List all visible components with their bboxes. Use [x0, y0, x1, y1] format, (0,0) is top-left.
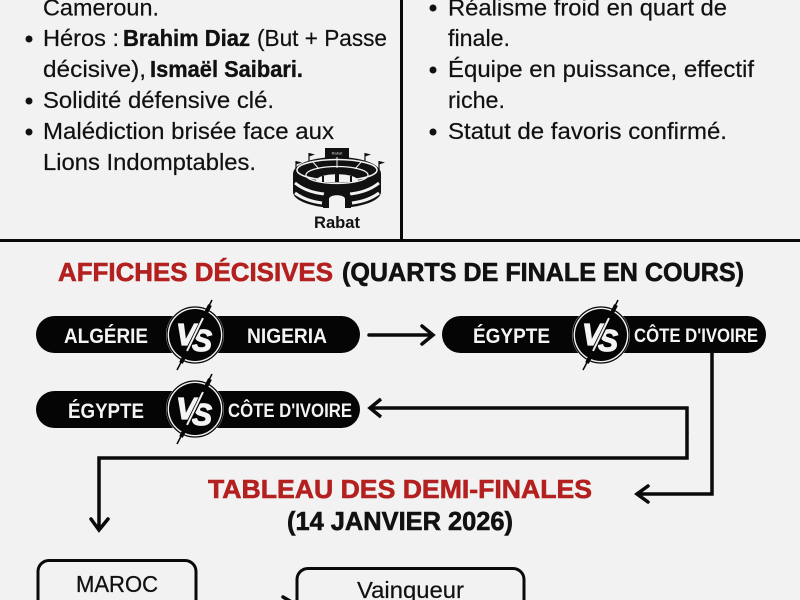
- text: curse broken: Malédiction brisée face aux: [43, 118, 335, 144]
- box: Maroc: [38, 560, 196, 600]
- label: Rabat: Rabat: [314, 213, 360, 232]
- match: Égypte vs Côte d'Ivoire (right): CÔTE D'IVOIRE: [634, 325, 758, 347]
- arrow: back to left match: [370, 399, 687, 433]
- text: team: [448, 56, 755, 113]
- text: heroes: Brahim Diaz: [123, 25, 250, 51]
- match: Algérie vs Nigeria: NIGERIA: [247, 325, 327, 348]
- text: defence: Solidité défensive clé.: [43, 87, 274, 113]
- heading: affiches décisives: AFFICHES DÉCISIVES: [58, 257, 333, 287]
- bullet: status: [430, 128, 436, 136]
- text: status: Statut de favoris confirmé.: [448, 118, 727, 144]
- bullet: defence: [26, 98, 32, 104]
- heading: tableau des demi-finales: TABLEAU DES DEMI-FINALES: [208, 474, 592, 504]
- arrow: to Vainqueur box: [283, 597, 295, 600]
- heading: tableau des demi-finales: [208, 474, 592, 536]
- arrow: connector to Maroc box: [91, 433, 687, 530]
- match: Égypte vs Côte d'Ivoire (right): ÉGYPTE: [473, 325, 550, 348]
- text: heroes: [43, 25, 387, 82]
- icon: Rabat stadium: [293, 148, 385, 232]
- text: heroes: Héros :: [43, 25, 119, 51]
- bullet: curse: [26, 128, 32, 136]
- match: Égypte vs Côte d'Ivoire (left): ÉGYPTE: [68, 400, 144, 423]
- text: curse broken: Lions Indomptables.: [43, 149, 256, 175]
- match: Algérie vs Nigeria: [36, 300, 360, 370]
- icon: Rabat stadium: Rabat: [332, 150, 343, 156]
- text: realism: [448, 0, 727, 51]
- match: Algérie vs Nigeria: V: [176, 317, 199, 352]
- match: Algérie vs Nigeria: ALGÉRIE: [64, 325, 148, 348]
- bullet: realism: [430, 4, 436, 12]
- match: Égypte vs Côte d'Ivoire (right): S: [598, 323, 618, 358]
- text: heroes: décisive),: [43, 56, 146, 82]
- match: Égypte vs Côte d'Ivoire (right): [442, 300, 766, 370]
- match: Égypte vs Côte d'Ivoire (left): CÔTE D'IVOIRE: [228, 400, 352, 422]
- text: team: Équipe en puissance, effectif: [448, 56, 755, 82]
- text: curse broken: [43, 118, 335, 175]
- text: realism: finale.: [448, 25, 510, 51]
- arrow: to Égypte match: [369, 326, 433, 344]
- match: Égypte vs Côte d'Ivoire (left): S: [192, 397, 212, 432]
- heading: tableau des demi-finales: (14 JANVIER 2026): [287, 506, 513, 536]
- bullet: heroes: [26, 36, 32, 42]
- match: Égypte vs Côte d'Ivoire (right): V: [582, 317, 605, 352]
- text: team: riche.: [448, 87, 505, 113]
- box: Maroc: MAROC: [76, 571, 158, 597]
- text: heroes: (But + Passe: [257, 25, 387, 51]
- panel: Maroc key points: [26, 0, 387, 175]
- match: Égypte vs Côte d'Ivoire (left): [36, 374, 360, 444]
- text: heroes: Ismaël Saibari.: [150, 56, 303, 82]
- match: Égypte vs Côte d'Ivoire (left): V: [176, 391, 199, 426]
- heading: affiches décisives: [58, 257, 744, 287]
- panel: favourites key points: [430, 0, 755, 144]
- heading: affiches décisives: (QUARTS DE FINALE EN COURS): [342, 257, 744, 287]
- arrow: Côte d'Ivoire to semi-final heading: [637, 353, 712, 502]
- box: Vainqueur: [297, 568, 524, 600]
- bullet: team: [430, 66, 436, 74]
- match: Algérie vs Nigeria: S: [192, 323, 212, 358]
